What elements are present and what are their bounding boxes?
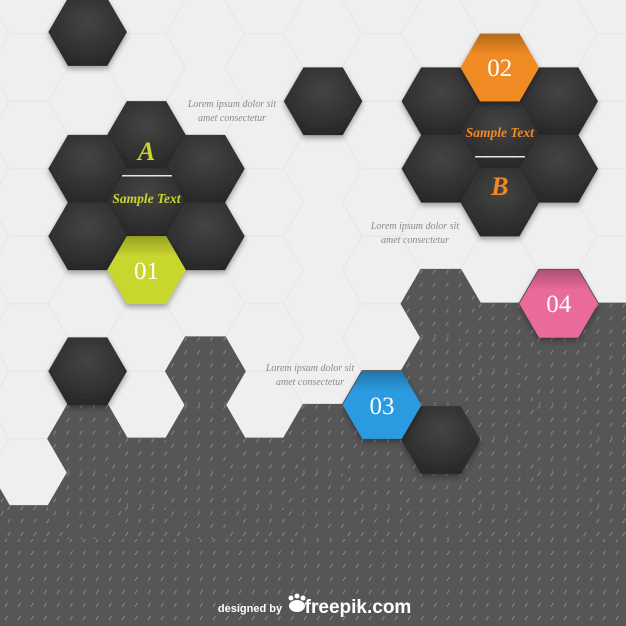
heading B: B (490, 172, 508, 201)
badge 01: 01 (134, 258, 159, 285)
icon: freepik logo (288, 594, 306, 612)
footer credit: freepik.com (305, 597, 411, 618)
badge 03 (343, 371, 421, 439)
badge 04: 04 (546, 291, 572, 318)
panel B cluster (402, 34, 598, 236)
badge 02 (460, 34, 539, 101)
badge 02: 02 (487, 55, 512, 82)
callout text 2: amet consectetur (381, 235, 449, 246)
gray patterned floor (0, 270, 626, 626)
badge 01 (107, 236, 186, 304)
text B: Sample Text (466, 125, 535, 140)
text A: Sample Text (112, 191, 182, 206)
callout text 1: Lorem ipsum dolor sit (188, 99, 276, 110)
panel A cluster (48, 101, 245, 304)
badge 03: 03 (370, 393, 394, 420)
callout text 1: amet consectetur (198, 113, 266, 124)
badge 04 (519, 270, 598, 338)
footer credit: designed by (218, 603, 283, 615)
callout text 3: amet consectetur (276, 377, 344, 388)
callout text 3: Lorem ipsum dolor sit (266, 363, 354, 374)
standalone dark hexes (48, 0, 480, 474)
callout text 2: Lorem ipsum dolor sit (371, 221, 459, 232)
heading A: A (136, 137, 155, 166)
footer credit (218, 594, 411, 618)
